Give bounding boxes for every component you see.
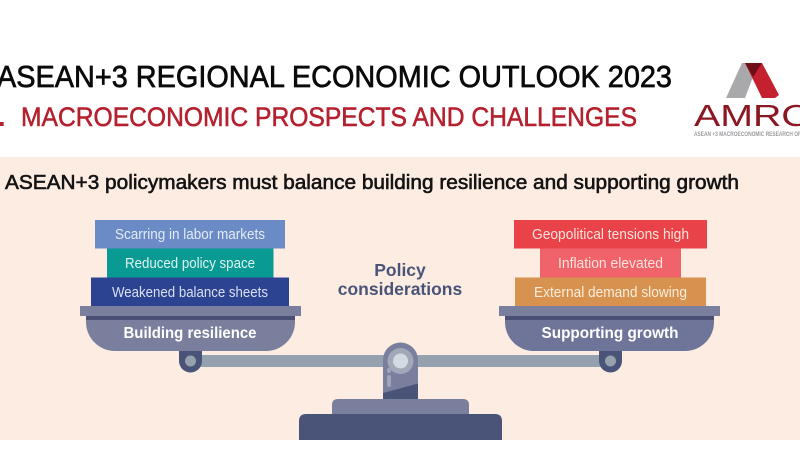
panel: policy balance <box>0 157 800 440</box>
block: external demand slowing: External demand slowing <box>534 285 687 301</box>
subtitle: MACROECONOMIC PROSPECTS AND CHALLENGES <box>21 102 637 132</box>
upper base <box>332 399 469 414</box>
block: reduced policy space <box>107 248 274 278</box>
block: inflation elevated <box>540 248 681 278</box>
right pivot <box>599 351 622 372</box>
centre label: policy considerations <box>338 260 462 299</box>
post <box>383 342 418 399</box>
logo: AMRO <box>694 63 800 138</box>
pan rim <box>499 306 720 316</box>
centre label: policy considerations: Policy <box>374 260 426 280</box>
block: weakened balance sheets: Weakened balance sheets <box>112 285 268 301</box>
scale stand <box>299 342 502 440</box>
pan label: Building resilience <box>124 325 257 342</box>
lower base <box>299 414 502 440</box>
block: geopolitical tensions high <box>514 220 707 248</box>
block: weakened balance sheets <box>91 278 289 306</box>
left pan: building resilience <box>80 220 301 351</box>
pan bowl <box>86 316 295 351</box>
centre label: policy considerations: considerations <box>338 279 462 299</box>
block: inflation elevated: Inflation elevated <box>558 256 663 272</box>
pan rim <box>80 306 301 316</box>
block: scarring in labor markets: Scarring in labor markets <box>115 227 265 243</box>
block: geopolitical tensions high: Geopolitical tensions high <box>532 227 689 243</box>
logo: AMRO: AMRO <box>694 98 800 133</box>
left pivot <box>179 351 202 372</box>
post joint <box>388 348 414 374</box>
block: reduced policy space: Reduced policy space <box>125 256 255 272</box>
panel heading: ASEAN+3 policymakers must balance building resilience and supporting growth <box>5 172 739 194</box>
block: scarring in labor markets <box>95 220 285 248</box>
pan label: Supporting growth <box>542 325 678 342</box>
scale beam <box>190 355 610 367</box>
right pan: supporting growth <box>499 220 720 351</box>
block: external demand slowing <box>515 278 706 306</box>
title: ASEAN+3 REGIONAL ECONOMIC OUTLOOK 2023 <box>0 59 672 94</box>
pan bowl <box>505 316 714 351</box>
